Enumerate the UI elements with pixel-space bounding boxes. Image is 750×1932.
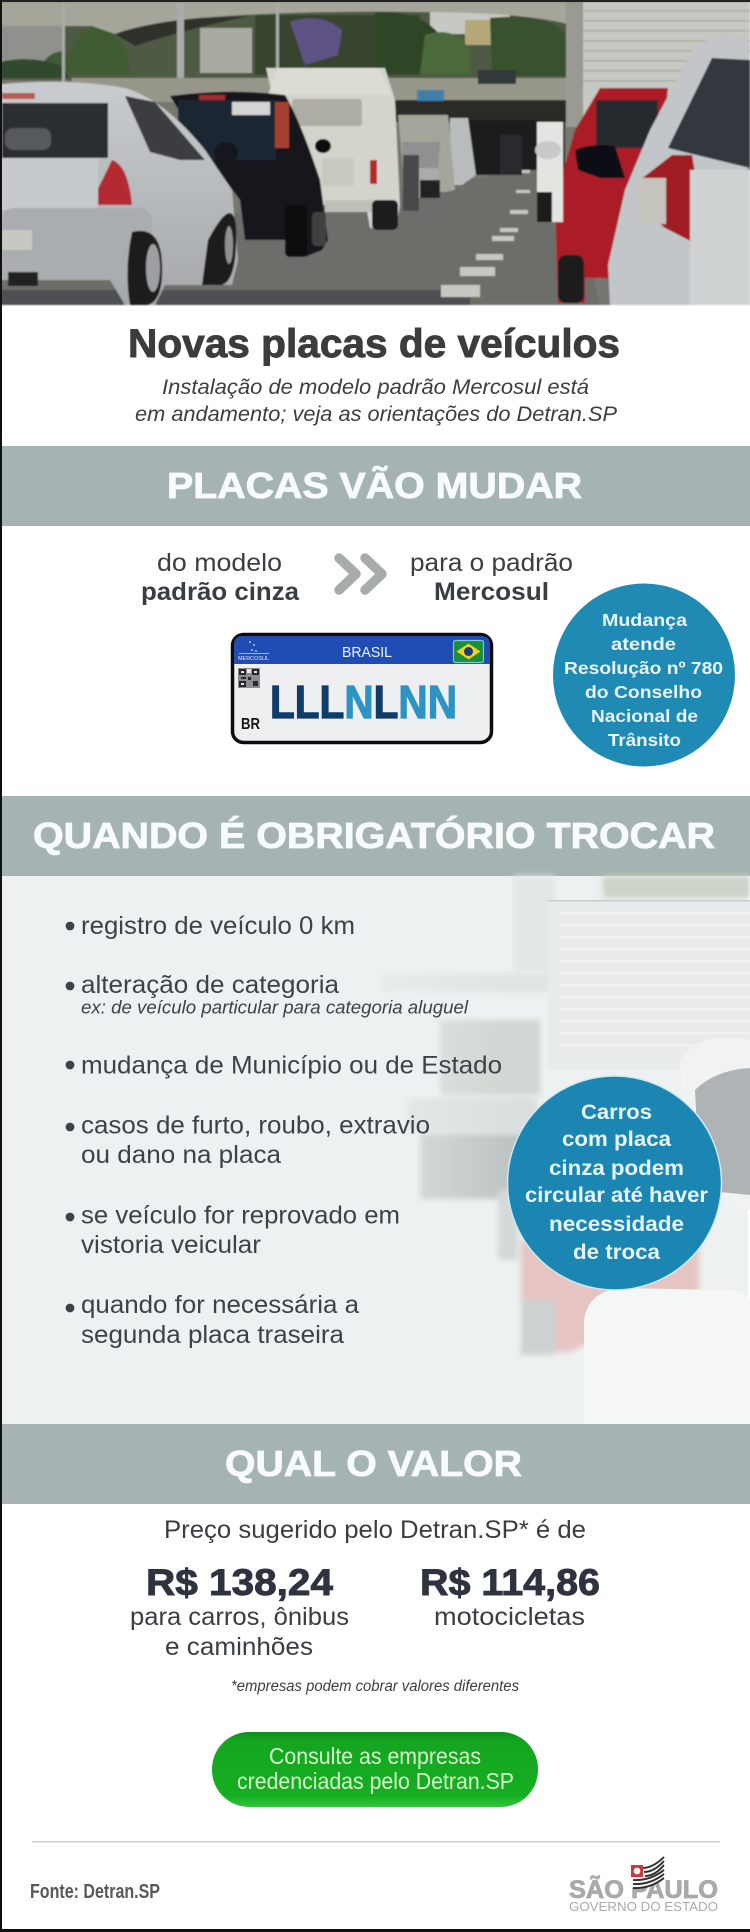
price: carros: R$ 138,24: [146, 1562, 333, 1603]
callout: carros com placa cinza: Carros: [581, 1101, 652, 1124]
text: do modelo padrão cinza: padrão cinza: [141, 578, 300, 606]
title: Novas placas de veículos: [128, 322, 620, 366]
photo: traffic jam on avenue: [0, 0, 750, 305]
list item: segunda placa: [66, 1291, 359, 1349]
list item: categoria: ex: de veículo particular para categoria aluguel: [81, 998, 469, 1018]
callout: resolução 780: [553, 584, 735, 766]
license plate: BR: [241, 716, 260, 733]
callout: carros com placa cinza: necessidade: [549, 1213, 684, 1236]
section banner: qual o valor: QUAL O VALOR: [225, 1443, 522, 1484]
callout: carros com placa cinza: com placa: [562, 1128, 671, 1151]
footnote: *empresas podem cobrar valores diferentes: [231, 1678, 519, 1695]
list item: vistoria: se veículo for reprovado em: [81, 1202, 400, 1230]
list item: categoria: [66, 971, 469, 1018]
list item: vistoria: [66, 1202, 400, 1259]
subtitle: Instalação de modelo padrão Mercosul está: [162, 376, 589, 399]
price: motocicletas: R$ 114,86: [420, 1562, 600, 1603]
list item: segunda placa: segunda placa traseira: [81, 1321, 344, 1349]
list item: categoria: alteração de categoria: [81, 971, 339, 999]
license plate: MERCOSUL: [238, 656, 269, 662]
callout: resolução 780: Mudança: [602, 610, 687, 630]
callout: resolução 780: Trânsito: [608, 730, 681, 750]
logo: Governo do Estado de São Paulo: SÃO PAULO: [569, 1874, 718, 1904]
text: do modelo padrão cinza: [141, 549, 300, 606]
subtitle: em andamento; veja as orientações do Detran.SP: [135, 403, 617, 426]
callout: carros com placa cinza: de troca: [573, 1241, 660, 1264]
list item: registro: registro de veículo 0 km: [81, 912, 355, 940]
list item: vistoria: vistoria veicular: [81, 1231, 261, 1259]
callout: carros com placa cinza: cinza podem: [549, 1157, 684, 1180]
list item: furto: ou dano na placa: [81, 1141, 281, 1169]
license plate: BRASIL: [342, 644, 392, 661]
red car: [555, 88, 668, 303]
icon: Brazilian flag: [454, 640, 484, 662]
button: consulte as empresas: Consulte as empresas: [269, 1743, 481, 1769]
icon: QR code: [238, 668, 260, 688]
section banner: quando é obrigatório trocar: QUANDO É OBRIGATÓRIO TROCAR: [33, 814, 715, 856]
section banner: placas vão mudar: PLACAS VÃO MUDAR: [167, 464, 582, 506]
callout: resolução 780: Nacional de: [591, 706, 698, 726]
logo: Governo do Estado de São Paulo: GOVERNO DO ESTADO: [569, 1900, 718, 1914]
list item: furto: [66, 1112, 430, 1169]
price: carros: [130, 1562, 349, 1661]
price: motocicletas: motocicletas: [434, 1603, 585, 1631]
white van: [266, 68, 400, 228]
arrow: double chevron: [339, 558, 382, 590]
section banner: quando é obrigatório trocar: [2, 796, 750, 876]
source: Fonte: Detran.SP: [30, 1881, 160, 1903]
logo: Governo do Estado de São Paulo: [569, 1855, 718, 1914]
icon: São Paulo flag: [631, 1855, 664, 1888]
black car: [170, 92, 328, 257]
overpass arch: [0, 2, 568, 34]
list item: município: mudança de Município ou de Estado: [81, 1052, 502, 1080]
text: para o padrão Mercosul: Mercosul: [434, 578, 549, 606]
text: preço sugerido: Preço sugerido pelo Detran.SP* é de: [164, 1516, 586, 1544]
far cars: [470, 130, 502, 175]
price: motocicletas: [420, 1562, 600, 1631]
callout: resolução 780: do Conselho: [585, 682, 702, 702]
text: para o padrão Mercosul: [410, 549, 573, 606]
button: consulte as empresas: [212, 1732, 538, 1807]
text: do modelo padrão cinza: do modelo: [157, 549, 282, 577]
list item: segunda placa: quando for necessária a: [81, 1291, 359, 1319]
button: consulte as empresas: credenciadas pelo Detran.SP: [237, 1768, 514, 1794]
price: carros: para carros, ônibus: [130, 1603, 349, 1631]
right silver car: [608, 33, 748, 305]
callout: carros com placa cinza: [508, 1076, 722, 1290]
silver car left: [0, 82, 238, 305]
callout: resolução 780: atende: [611, 634, 676, 654]
price: carros: e caminhões: [165, 1633, 313, 1661]
license plate: LLLNLNN: [270, 676, 457, 728]
text: para o padrão Mercosul: para o padrão: [410, 549, 573, 577]
section banner: qual o valor: [2, 1424, 750, 1504]
list item: furto: casos de furto, roubo, extravio: [81, 1112, 430, 1140]
license plate: [232, 634, 492, 742]
road dashes: [441, 170, 530, 297]
list: when replacement is mandatory: [66, 912, 502, 1349]
subtitle: [135, 376, 617, 426]
section banner: placas vão mudar: [2, 446, 750, 526]
faded photo background: [2, 876, 750, 1424]
truck: [569, 2, 750, 122]
callout: resolução 780: Resolução nº 780: [564, 658, 723, 678]
callout: carros com placa cinza: circular até haver: [525, 1184, 708, 1207]
